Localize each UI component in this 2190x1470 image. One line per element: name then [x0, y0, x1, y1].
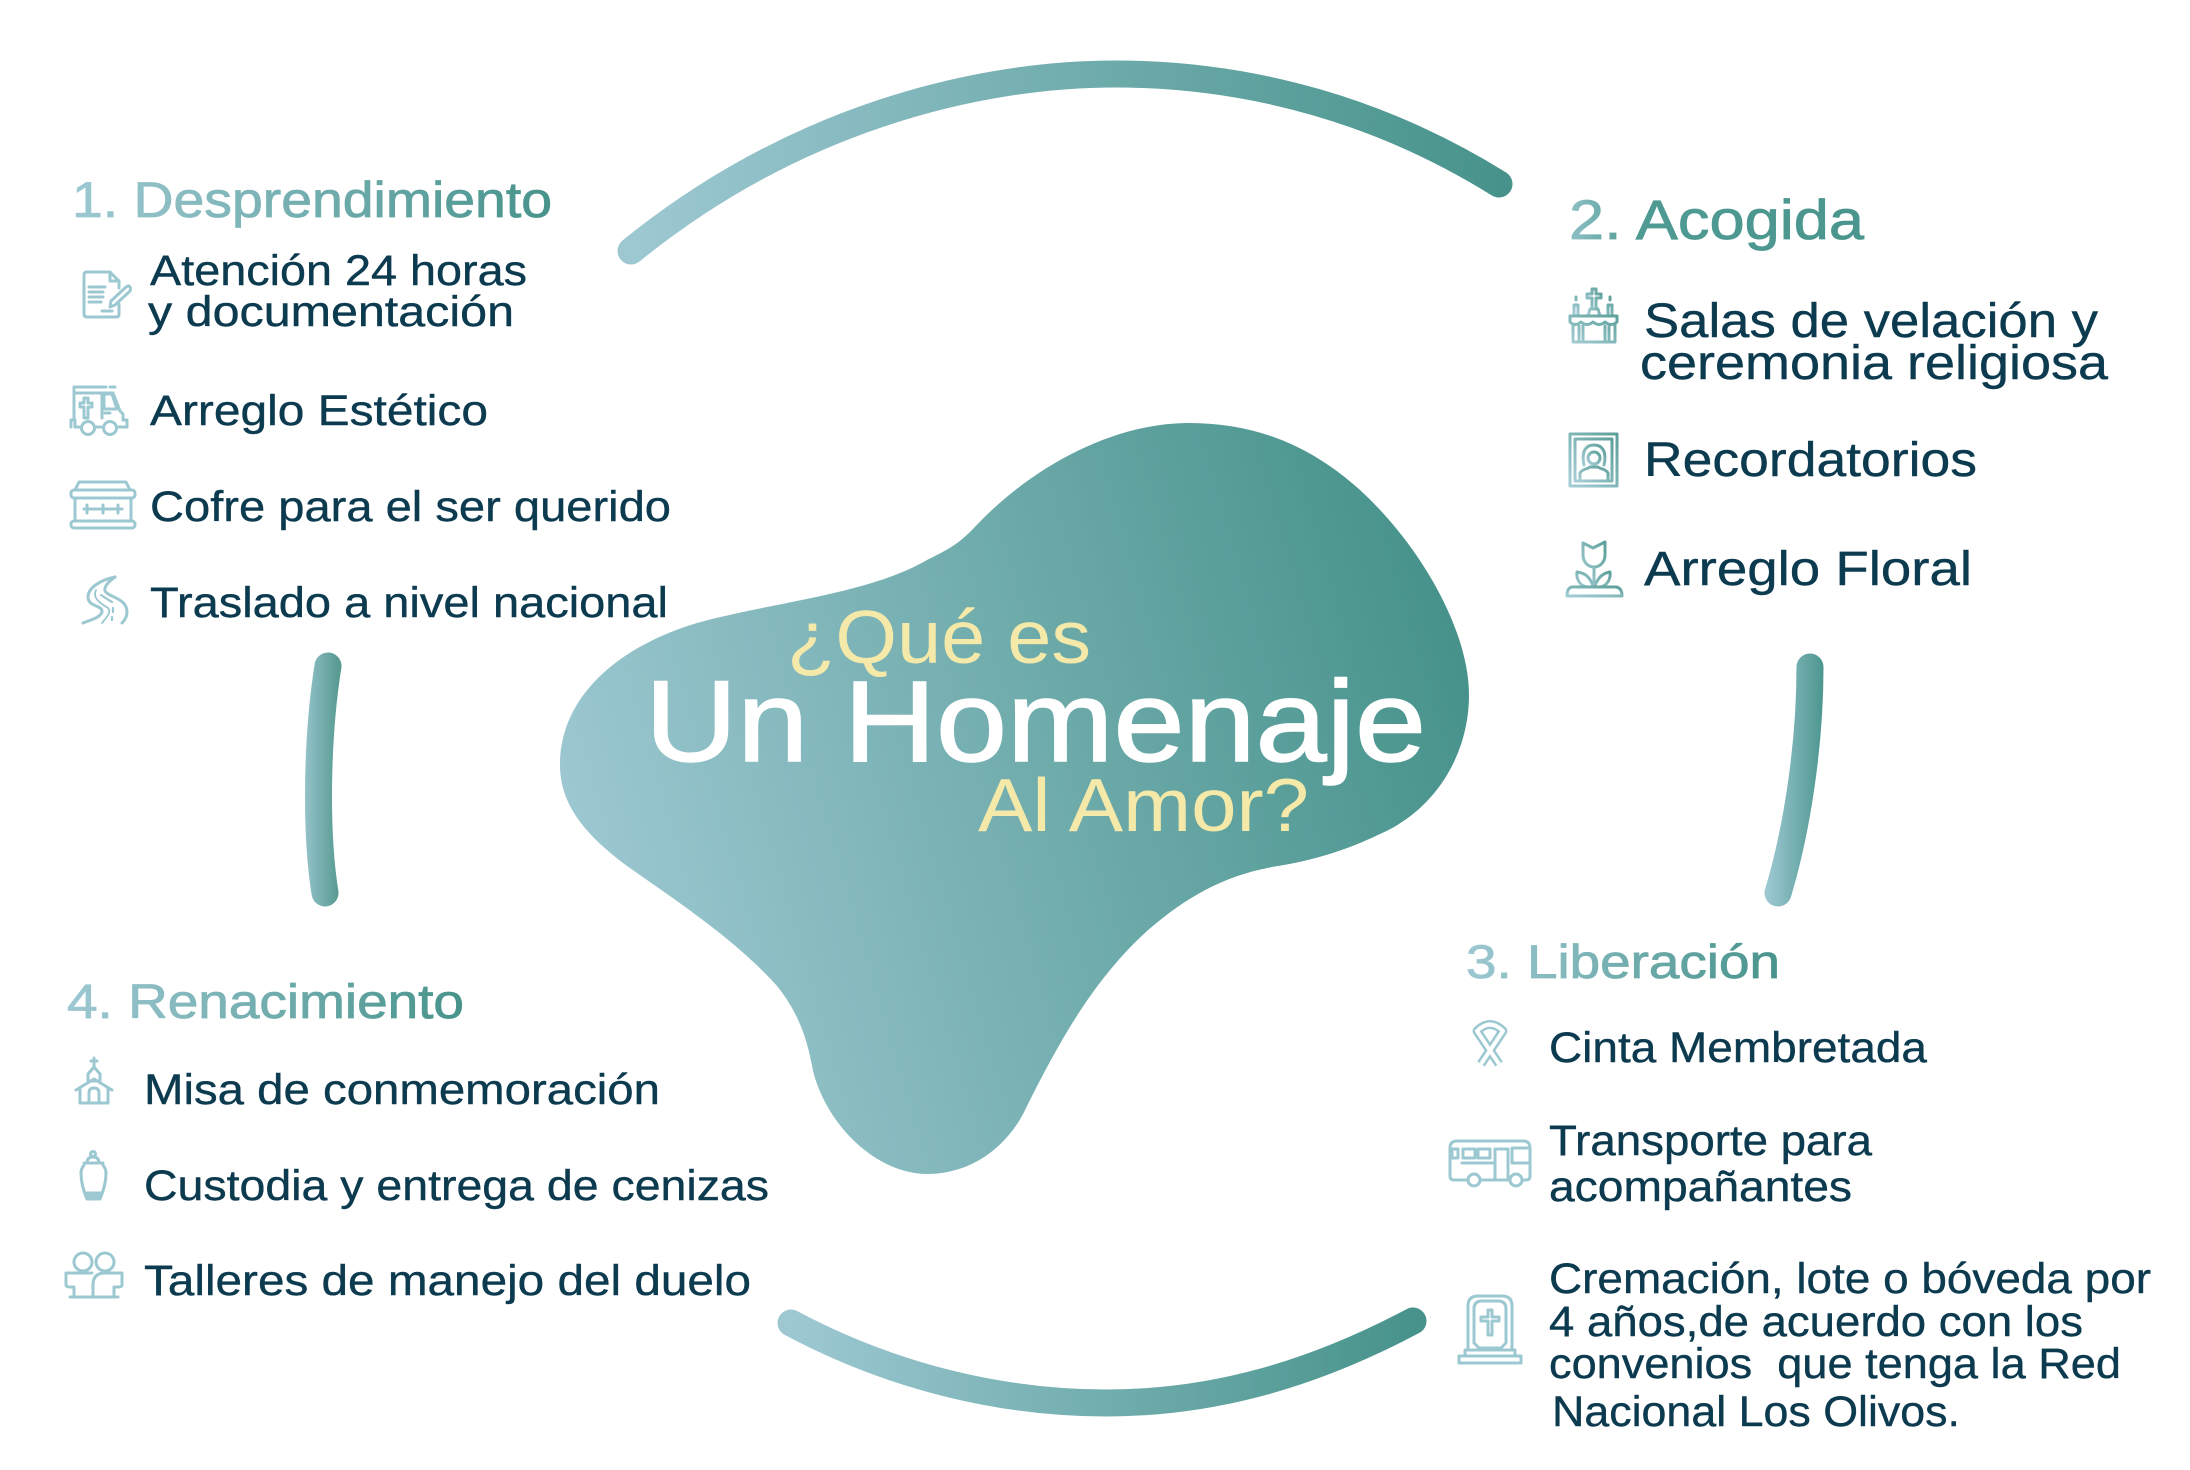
icon: people [66, 1253, 122, 1297]
item: Arreglo Estético: Arreglo Estético [150, 387, 488, 435]
heading 4: 4. Renacimiento [67, 976, 464, 1029]
icon: altar [1570, 289, 1617, 342]
arc: right [1778, 667, 1810, 893]
icon: urn [81, 1152, 106, 1199]
icon: tulip [1567, 542, 1622, 596]
arc: left [319, 666, 328, 893]
panel: 3 Liberación [1450, 935, 2151, 1436]
icon: hearse [71, 387, 127, 434]
item: Atención 24 horas y documentación: y documentación [148, 288, 514, 336]
arc: top [631, 74, 1499, 251]
item: Arreglo Floral: Arreglo Floral [1644, 543, 1972, 596]
central blob [560, 423, 1469, 1174]
item: Salas de velación: ceremonia religiosa [1640, 337, 2108, 390]
central title [645, 595, 1426, 847]
item: Transporte para acompañantes: Transporte para [1549, 1117, 1872, 1165]
item: Atención 24 horas y documentación [148, 247, 527, 336]
item: Cremación: 4 años,de acuerdo con los [1549, 1298, 2083, 1346]
arc: bottom [791, 1321, 1413, 1403]
icon: coffin [71, 482, 135, 528]
heading 3: 3. Liberación [1466, 935, 1780, 988]
item: Cremación: Nacional Los Olivos. [1552, 1388, 1960, 1436]
item: Cremación: convenios que tenga la Red [1549, 1340, 2121, 1388]
item: Transporte para acompañantes: acompañantes [1549, 1163, 1852, 1211]
item: Atención 24 horas y documentación: Atención 24 horas [150, 247, 527, 295]
item: Cremación [1549, 1255, 2151, 1436]
icon: ribbon [1477, 1024, 1503, 1064]
item: Custodia: Custodia y entrega de cenizas [144, 1162, 769, 1210]
item: Transporte para acompañantes [1549, 1117, 1872, 1211]
item: Cofre: Cofre para el ser querido [150, 483, 671, 531]
item: Misa: Misa de conmemoración [144, 1066, 660, 1114]
item: Salas de velación: Salas de velación y [1644, 295, 2098, 348]
icon: bus [1450, 1141, 1530, 1186]
icon: portrait [1570, 434, 1617, 486]
item: Cremación: Cremación, lote o bóveda por [1549, 1255, 2151, 1303]
panel: 1 Desprendimiento [71, 172, 671, 627]
item: Talleres: Talleres de manejo del duelo [144, 1257, 751, 1305]
icon: document and pen [84, 272, 130, 317]
icon: road [83, 577, 127, 623]
heading 2: 2. Acogida [1569, 188, 1865, 251]
title line: Qué es: ¿Qué es [787, 595, 1091, 679]
title line: Al Amor: Al Amor? [978, 763, 1309, 847]
icon: gravestone [1459, 1296, 1521, 1363]
panel: 4 Renacimiento [66, 976, 769, 1305]
heading 1: 1. Desprendimiento [72, 172, 552, 228]
icon: church [76, 1058, 112, 1103]
item: Cinta Membretada: Cinta Membretada [1549, 1024, 1927, 1072]
item: Traslado: Traslado a nivel nacional [150, 579, 668, 627]
item: Recordatorios: Recordatorios [1644, 434, 1977, 487]
panel: 2 Acogida [1567, 188, 2108, 596]
title line: Un Homenaje: Un Homenaje [645, 658, 1426, 786]
item: Salas de velación [1640, 295, 2108, 390]
